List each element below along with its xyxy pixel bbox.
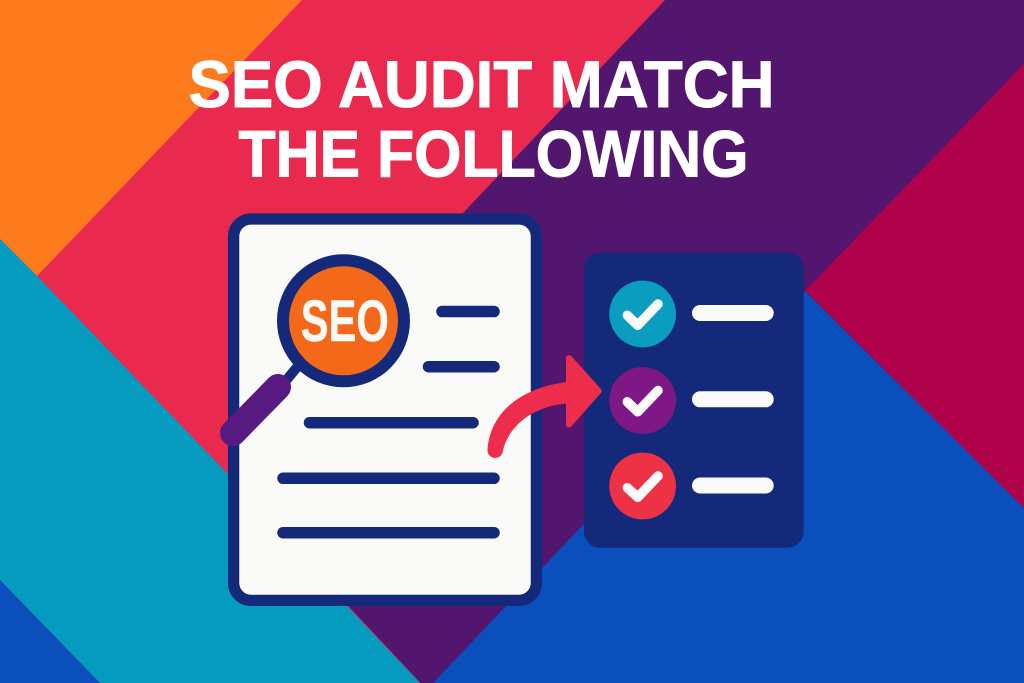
checklist item 1 (609, 281, 766, 347)
checklist item 2 (609, 367, 766, 434)
title: THE FOLLOWING (238, 116, 748, 190)
icon: magnifying glass with SEO (233, 260, 404, 433)
document text lines (283, 312, 494, 533)
checklist item 3 (609, 453, 766, 519)
title (188, 47, 774, 190)
checklist panel (584, 253, 804, 548)
document panel (234, 219, 536, 600)
icon: magnifying glass with SEO: SEO (301, 289, 389, 354)
arrow: document to checklist (487, 358, 599, 458)
title: SEO AUDIT MATCH (188, 47, 774, 121)
